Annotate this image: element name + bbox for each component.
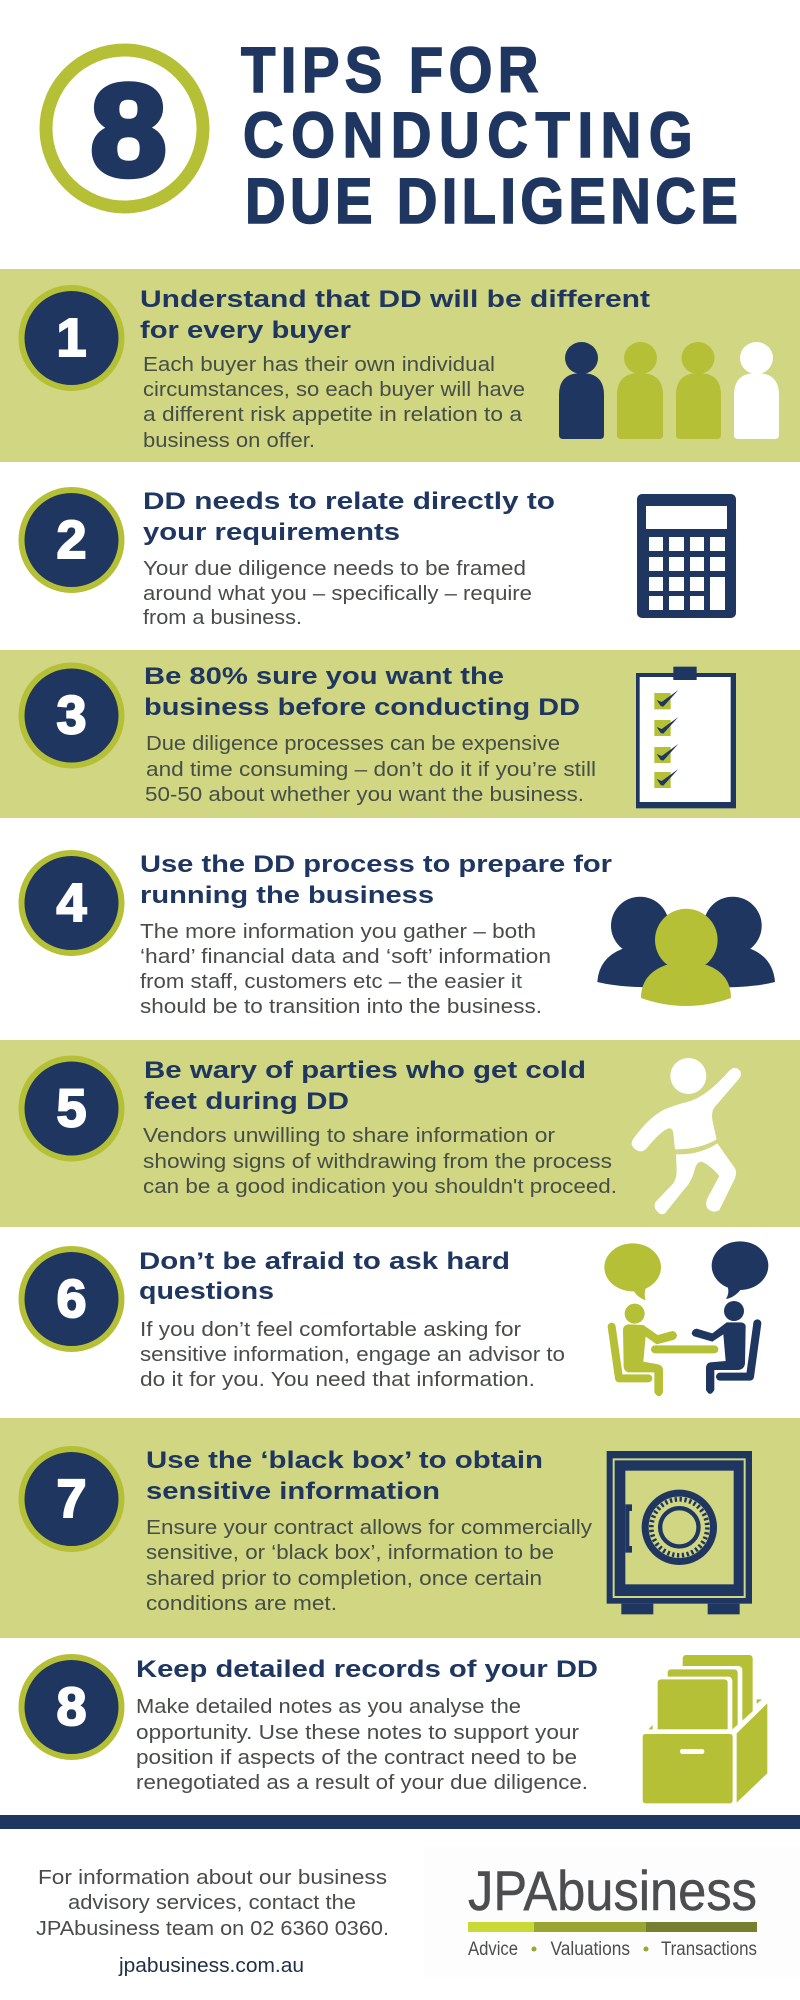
icon: four people — [559, 342, 779, 439]
footer contact text: jpabusiness.com.au — [118, 1955, 304, 1977]
number badge 4: 4 — [56, 873, 87, 933]
number badge 2: 2 — [56, 510, 87, 570]
body text 2: from a business. — [143, 607, 302, 629]
number badge 1 — [22, 288, 122, 388]
heading 4 — [140, 851, 612, 909]
divider bar — [0, 1815, 800, 1829]
body text 5: Vendors unwilling to share information or — [143, 1125, 555, 1147]
number badge 6: 6 — [56, 1269, 87, 1329]
heading 4: running the business — [140, 882, 434, 909]
heading 4: Use the DD process to prepare for — [140, 851, 612, 878]
body text 7: Ensure your contract allows for commercially — [146, 1517, 592, 1539]
body text 5 — [143, 1125, 617, 1198]
JPAbusiness logo: Valuations — [550, 1939, 630, 1960]
header: big 8 badge and title — [46, 34, 738, 237]
icon: file box — [642, 1655, 767, 1803]
number badge 8: 8 — [56, 1677, 87, 1737]
body text 8: opportunity. Use these notes to support your — [136, 1722, 579, 1744]
title: DUE DILIGENCE — [245, 165, 738, 237]
body text 1: a different risk appetite in relation to a — [143, 404, 523, 426]
JPAbusiness logo: Advice — [468, 1939, 518, 1960]
body text 4: from staff, customers etc – the easier it — [140, 971, 522, 993]
body text 4: should be to transition into the business. — [140, 996, 542, 1018]
heading 6: Don’t be afraid to ask hard — [139, 1248, 510, 1275]
body text 2: around what you – specifically – require — [143, 583, 532, 605]
icon: clipboard checklist — [636, 667, 736, 808]
heading 6: questions — [139, 1278, 274, 1305]
body text 3: 50-50 about whether you want the business. — [145, 784, 584, 806]
body text 4: ‘hard’ financial data and ‘soft’ information — [140, 946, 551, 968]
number badge 5: 5 — [56, 1078, 87, 1138]
body text 7: shared prior to completion, once certain — [146, 1568, 542, 1590]
heading 3 — [144, 663, 580, 721]
heading 2 — [143, 488, 555, 546]
footer contact text: advisory services, contact the — [68, 1892, 356, 1914]
body text 3 — [145, 733, 596, 806]
title: CONDUCTING — [243, 99, 693, 171]
icon: team group — [597, 897, 775, 1006]
footer contact text: JPAbusiness team on 02 6360 0360. — [36, 1918, 389, 1940]
heading 7: Use the ‘black box’ to obtain — [146, 1447, 543, 1474]
body text 5: can be a good indication you shouldn't proceed. — [143, 1176, 617, 1198]
icon: figure backing away — [632, 1058, 741, 1214]
body text 6: If you don’t feel comfortable asking for — [140, 1319, 521, 1341]
panel: tip 2 — [22, 488, 736, 629]
panel: tip 7 — [0, 1418, 800, 1638]
footer contact text: For information about our business — [38, 1867, 387, 1889]
heading 5: Be wary of parties who get cold — [144, 1057, 586, 1084]
heading 3: business before conducting DD — [144, 694, 580, 721]
body text 5: showing signs of withdrawing from the process — [143, 1151, 612, 1173]
number badge 7: 7 — [56, 1469, 87, 1529]
number badge 7 — [22, 1449, 122, 1549]
icon: two people talking at a table — [604, 1241, 768, 1396]
heading 1: Understand that DD will be different — [140, 286, 650, 313]
number badge 3 — [22, 666, 122, 766]
body text 4: The more information you gather – both — [140, 921, 536, 943]
body text 8: Make detailed notes as you analyse the — [136, 1696, 521, 1718]
panel: tip 1 — [0, 269, 800, 462]
body text 1: business on offer. — [143, 430, 315, 452]
heading 5 — [144, 1057, 586, 1115]
footer contact text — [36, 1867, 389, 1977]
body text 1: circumstances, so each buyer will have — [143, 379, 525, 401]
panel: tip 6 — [22, 1241, 768, 1396]
heading 3: Be 80% sure you want the — [144, 663, 504, 690]
body text 8: position if aspects of the contract need to be — [136, 1747, 577, 1769]
title: TIPS FOR — [241, 34, 538, 106]
heading 7: sensitive information — [146, 1478, 440, 1505]
heading 1 — [140, 286, 650, 344]
heading 6 — [139, 1248, 510, 1305]
number badge 4 — [22, 853, 122, 953]
number badge 1: 1 — [56, 308, 87, 368]
number badge 3: 3 — [56, 686, 87, 746]
panel: tip 8 — [22, 1655, 767, 1803]
panel: tip 5 — [0, 1040, 800, 1227]
body text 6 — [140, 1319, 565, 1391]
big number 8 badge — [46, 50, 203, 207]
body text 8: renegotiated as a result of your due diligence. — [136, 1772, 588, 1794]
title — [241, 34, 738, 237]
JPAbusiness logo: Transactions — [661, 1939, 757, 1960]
number badge 8 — [22, 1657, 122, 1757]
body text 2 — [143, 558, 532, 629]
panel: tip 4 — [22, 851, 775, 1018]
body text 8 — [136, 1696, 588, 1794]
JPAbusiness logo — [423, 1847, 800, 1977]
heading 2: your requirements — [143, 519, 400, 546]
number badge 6 — [22, 1249, 122, 1349]
big number 8 badge: 8 — [90, 57, 166, 203]
body text 7: sensitive, or ‘black box’, information to be — [146, 1542, 554, 1564]
body text 3: and time consuming – don’t do it if you’re still — [146, 759, 596, 781]
JPAbusiness logo: JPAbusiness — [468, 1859, 757, 1922]
panel: tip 3 — [0, 650, 800, 818]
heading 8: Keep detailed records of your DD — [136, 1656, 598, 1683]
heading 2: DD needs to relate directly to — [143, 488, 555, 515]
body text 6: sensitive information, engage an advisor to — [140, 1344, 565, 1366]
body text 4 — [140, 921, 551, 1018]
body text 1: Each buyer has their own individual — [143, 354, 495, 376]
heading 1: for every buyer — [140, 317, 351, 344]
number badge 5 — [22, 1058, 122, 1158]
number badge 2 — [22, 490, 122, 590]
icon: safe — [607, 1451, 752, 1614]
body text 7 — [146, 1517, 592, 1615]
body text 7: conditions are met. — [146, 1593, 337, 1615]
icon: calculator — [637, 494, 736, 618]
body text 6: do it for you. You need that information. — [140, 1369, 535, 1391]
heading 5: feet during DD — [144, 1088, 349, 1115]
body text 1 — [143, 354, 525, 452]
heading 7 — [146, 1447, 543, 1505]
body text 3: Due diligence processes can be expensive — [146, 733, 560, 755]
body text 2: Your due diligence needs to be framed — [143, 558, 526, 580]
